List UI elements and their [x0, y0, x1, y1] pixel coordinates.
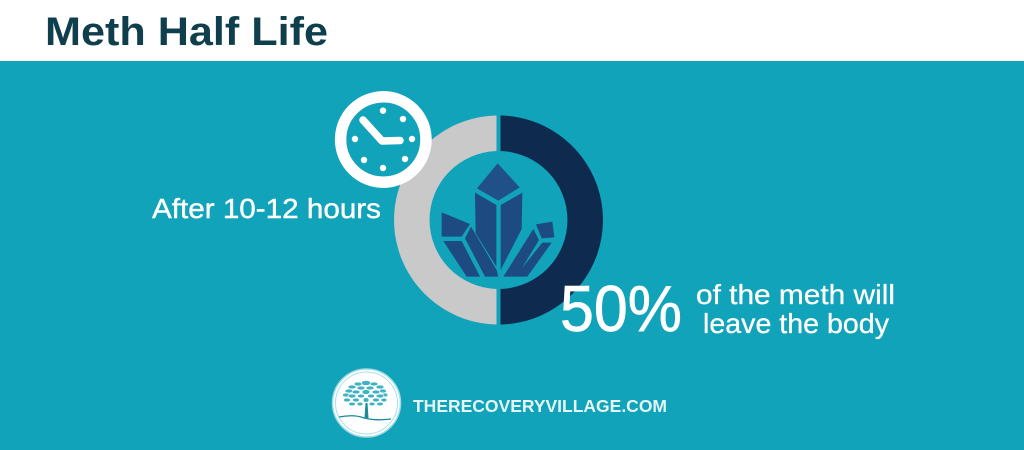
logo text: THERECOVERYVILLAGE.COM — [413, 396, 667, 416]
clock hands — [363, 120, 400, 141]
stat: 50 percent: 50% — [560, 272, 682, 345]
stat description: leave the body — [703, 308, 889, 339]
icon: crystals — [442, 163, 554, 277]
tree trunk and ground — [364, 403, 368, 418]
tree canopy — [342, 380, 388, 406]
donut chart: 50 percent — [394, 116, 603, 324]
label: after 10-12 hours: After 10-12 hours — [152, 193, 381, 224]
logo: tree emblem — [332, 369, 400, 437]
donut segment: eliminated (navy) — [500, 116, 603, 324]
title: Meth Half Life — [45, 10, 328, 54]
donut segment: remaining (grey) — [394, 116, 496, 324]
clock hour dots — [352, 108, 415, 171]
stat description — [696, 279, 895, 339]
icon: clock — [341, 97, 426, 182]
stat description: of the meth will — [696, 279, 895, 310]
